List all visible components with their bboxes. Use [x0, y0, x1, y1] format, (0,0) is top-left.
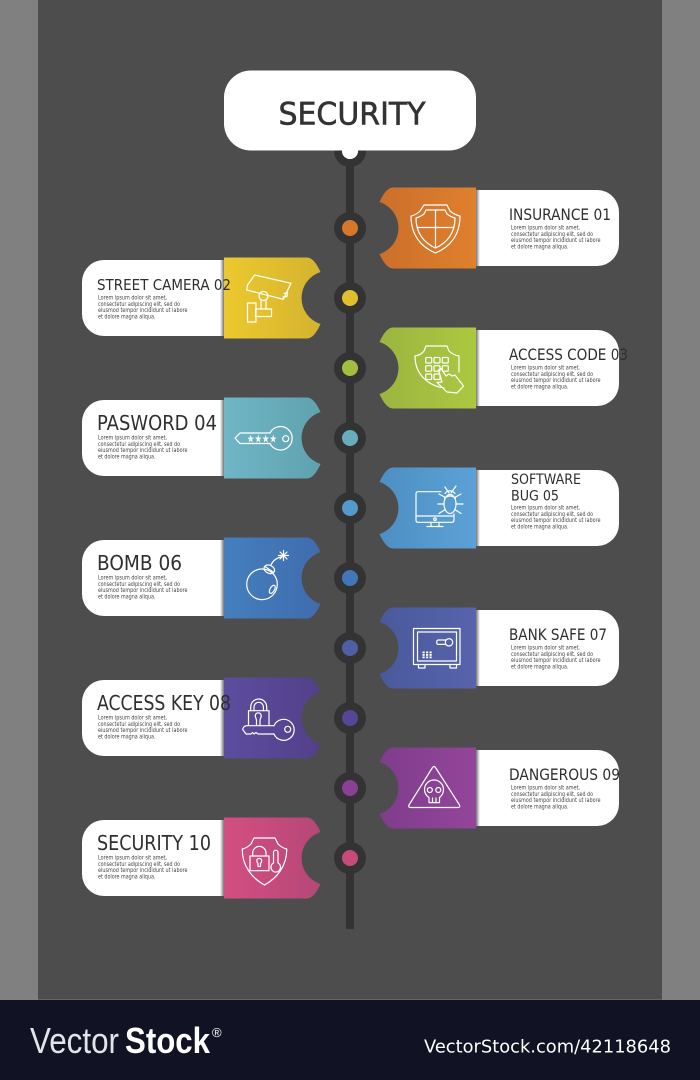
footer bar — [0, 1000, 700, 1080]
text block: consectetur adipiscing elit, sed do — [98, 440, 180, 448]
shadow — [220, 820, 224, 896]
panel: dangerous 09 — [380, 748, 620, 828]
footer logo: Stock — [125, 1020, 211, 1061]
text block: Lorem ipsum dolor sit amet, — [511, 504, 580, 512]
panel: street camera 02 — [82, 258, 320, 338]
title box: SECURITY — [278, 96, 426, 132]
heading: BANK SAFE 07 — [509, 625, 607, 644]
text block: Lorem ipsum dolor sit amet, — [511, 784, 580, 792]
panel: bomb 06 — [82, 538, 320, 618]
text block: et dolore magna aliqua. — [98, 592, 156, 600]
text block: Lorem ipsum dolor sit amet, — [98, 294, 167, 302]
text block: et dolore magna aliqua. — [511, 382, 568, 390]
card — [476, 190, 619, 266]
title connector — [334, 135, 366, 167]
icon: password stars: ★★★★ — [247, 432, 277, 446]
text block — [98, 714, 188, 740]
text block: et dolore magna aliqua. — [98, 452, 156, 460]
text block: et dolore magna aliqua. — [511, 522, 568, 530]
panel: software bug 05 — [380, 468, 619, 548]
text block — [98, 294, 188, 320]
text block: consectetur adipiscing elit, sed do — [511, 370, 593, 378]
text block — [511, 364, 601, 390]
text block — [511, 784, 601, 810]
shadow — [220, 400, 224, 476]
text block: eiusmod tempor incididunt ut labore — [98, 586, 188, 594]
tab — [380, 188, 476, 268]
text block: et dolore magna aliqua. — [511, 662, 568, 670]
text block: Lorem ipsum dolor sit amet, — [511, 364, 580, 372]
text block: consectetur adipiscing elit, sed do — [511, 230, 593, 238]
text block: eiusmod tempor incididunt ut labore — [98, 306, 188, 314]
text block: consectetur adipiscing elit, sed do — [511, 650, 593, 658]
text block — [98, 854, 188, 880]
tab — [224, 538, 320, 618]
panel: access code 03 — [380, 328, 628, 408]
shadow — [220, 540, 224, 616]
card — [476, 470, 619, 546]
icon: keypad shield — [415, 346, 464, 393]
text block: consectetur adipiscing elit, sed do — [511, 790, 593, 798]
tab — [224, 258, 320, 338]
panel: bank safe 07 — [380, 608, 619, 688]
card — [82, 820, 224, 896]
text block: consectetur adipiscing elit, sed do — [98, 720, 180, 728]
text block: consectetur adipiscing elit, sed do — [98, 580, 180, 588]
tab — [380, 748, 476, 828]
tab — [380, 608, 476, 688]
icon: lock and key — [243, 699, 294, 740]
heading: SOFTWARE — [511, 472, 581, 488]
text block: Lorem ipsum dolor sit amet, — [98, 714, 167, 722]
panel: access key 08 — [82, 678, 320, 758]
text block: et dolore magna aliqua. — [98, 732, 156, 740]
text block: Lorem ipsum dolor sit amet, — [511, 644, 580, 652]
text block: eiusmod tempor incididunt ut labore — [511, 236, 601, 244]
heading: SECURITY 10 — [97, 831, 211, 855]
footer logo — [30, 1020, 222, 1061]
text block: consectetur adipiscing elit, sed do — [98, 860, 180, 868]
title box — [224, 70, 476, 159]
heading: PASWORD 04 — [97, 411, 217, 435]
card — [82, 540, 224, 616]
icon: password key — [235, 427, 292, 450]
heading: ACCESS KEY 08 — [97, 691, 231, 715]
footer logo: Vector — [30, 1020, 119, 1061]
timeline spine — [346, 150, 354, 929]
text block: et dolore magna aliqua. — [98, 872, 156, 880]
icon: skull warning — [409, 766, 460, 808]
text block: Lorem ipsum dolor sit amet, — [98, 434, 167, 442]
text block: consectetur adipiscing elit, sed do — [98, 300, 180, 308]
text block: et dolore magna aliqua. — [511, 242, 568, 250]
text block: eiusmod tempor incididunt ut labore — [511, 516, 601, 524]
text block: eiusmod tempor incididunt ut labore — [511, 656, 601, 664]
tab — [224, 398, 320, 478]
shadow — [476, 750, 480, 826]
text block: et dolore magna aliqua. — [98, 312, 156, 320]
text block — [98, 434, 188, 460]
text block: et dolore magna aliqua. — [511, 802, 568, 810]
icon: bomb — [247, 550, 288, 600]
card — [476, 330, 619, 406]
text block: consectetur adipiscing elit, sed do — [511, 510, 593, 518]
text block: eiusmod tempor incididunt ut labore — [511, 376, 601, 384]
footer logo: ® — [212, 1025, 222, 1040]
text block — [98, 574, 188, 600]
shadow — [476, 470, 480, 546]
panel: insurance 01 — [380, 188, 619, 268]
shadow — [220, 260, 224, 336]
tab — [380, 328, 476, 408]
timeline nodes — [334, 212, 366, 874]
panel: pasword 04 — [82, 398, 320, 478]
icon: software bug — [416, 486, 463, 526]
heading: ACCESS CODE 03 — [509, 345, 628, 364]
heading: INSURANCE 01 — [509, 205, 611, 224]
icon: street camera — [247, 275, 291, 322]
card — [476, 610, 619, 686]
shadow — [476, 330, 480, 406]
text block: eiusmod tempor incididunt ut labore — [511, 796, 601, 804]
text block — [511, 224, 601, 250]
tab — [380, 468, 476, 548]
card — [82, 400, 224, 476]
text block — [511, 644, 601, 670]
heading: DANGEROUS 09 — [509, 765, 620, 784]
shadow — [220, 680, 224, 756]
heading: BUG 05 — [511, 488, 559, 504]
text block: Lorem ipsum dolor sit amet, — [98, 854, 167, 862]
icon: shield lock — [242, 838, 287, 885]
shadow — [476, 190, 480, 266]
card — [82, 260, 224, 336]
card — [476, 750, 619, 826]
icon: safe keypad — [422, 652, 432, 658]
tab — [224, 678, 320, 758]
text block: eiusmod tempor incididunt ut labore — [98, 866, 188, 874]
panel: security 10 — [82, 818, 320, 898]
text block: eiusmod tempor incididunt ut labore — [98, 446, 188, 454]
text block: Lorem ipsum dolor sit amet, — [511, 224, 580, 232]
footer url: VectorStock.com/42118648 — [424, 1036, 671, 1058]
icon: shield — [411, 205, 460, 253]
heading: STREET CAMERA 02 — [97, 276, 231, 294]
tab — [224, 818, 320, 898]
icon: bank safe — [414, 628, 460, 668]
text block — [511, 504, 601, 530]
text block: Lorem ipsum dolor sit amet, — [98, 574, 167, 582]
heading: BOMB 06 — [97, 551, 182, 575]
heading — [511, 472, 581, 504]
text block: eiusmod tempor incididunt ut labore — [98, 726, 188, 734]
shadow — [476, 610, 480, 686]
card — [82, 680, 224, 756]
